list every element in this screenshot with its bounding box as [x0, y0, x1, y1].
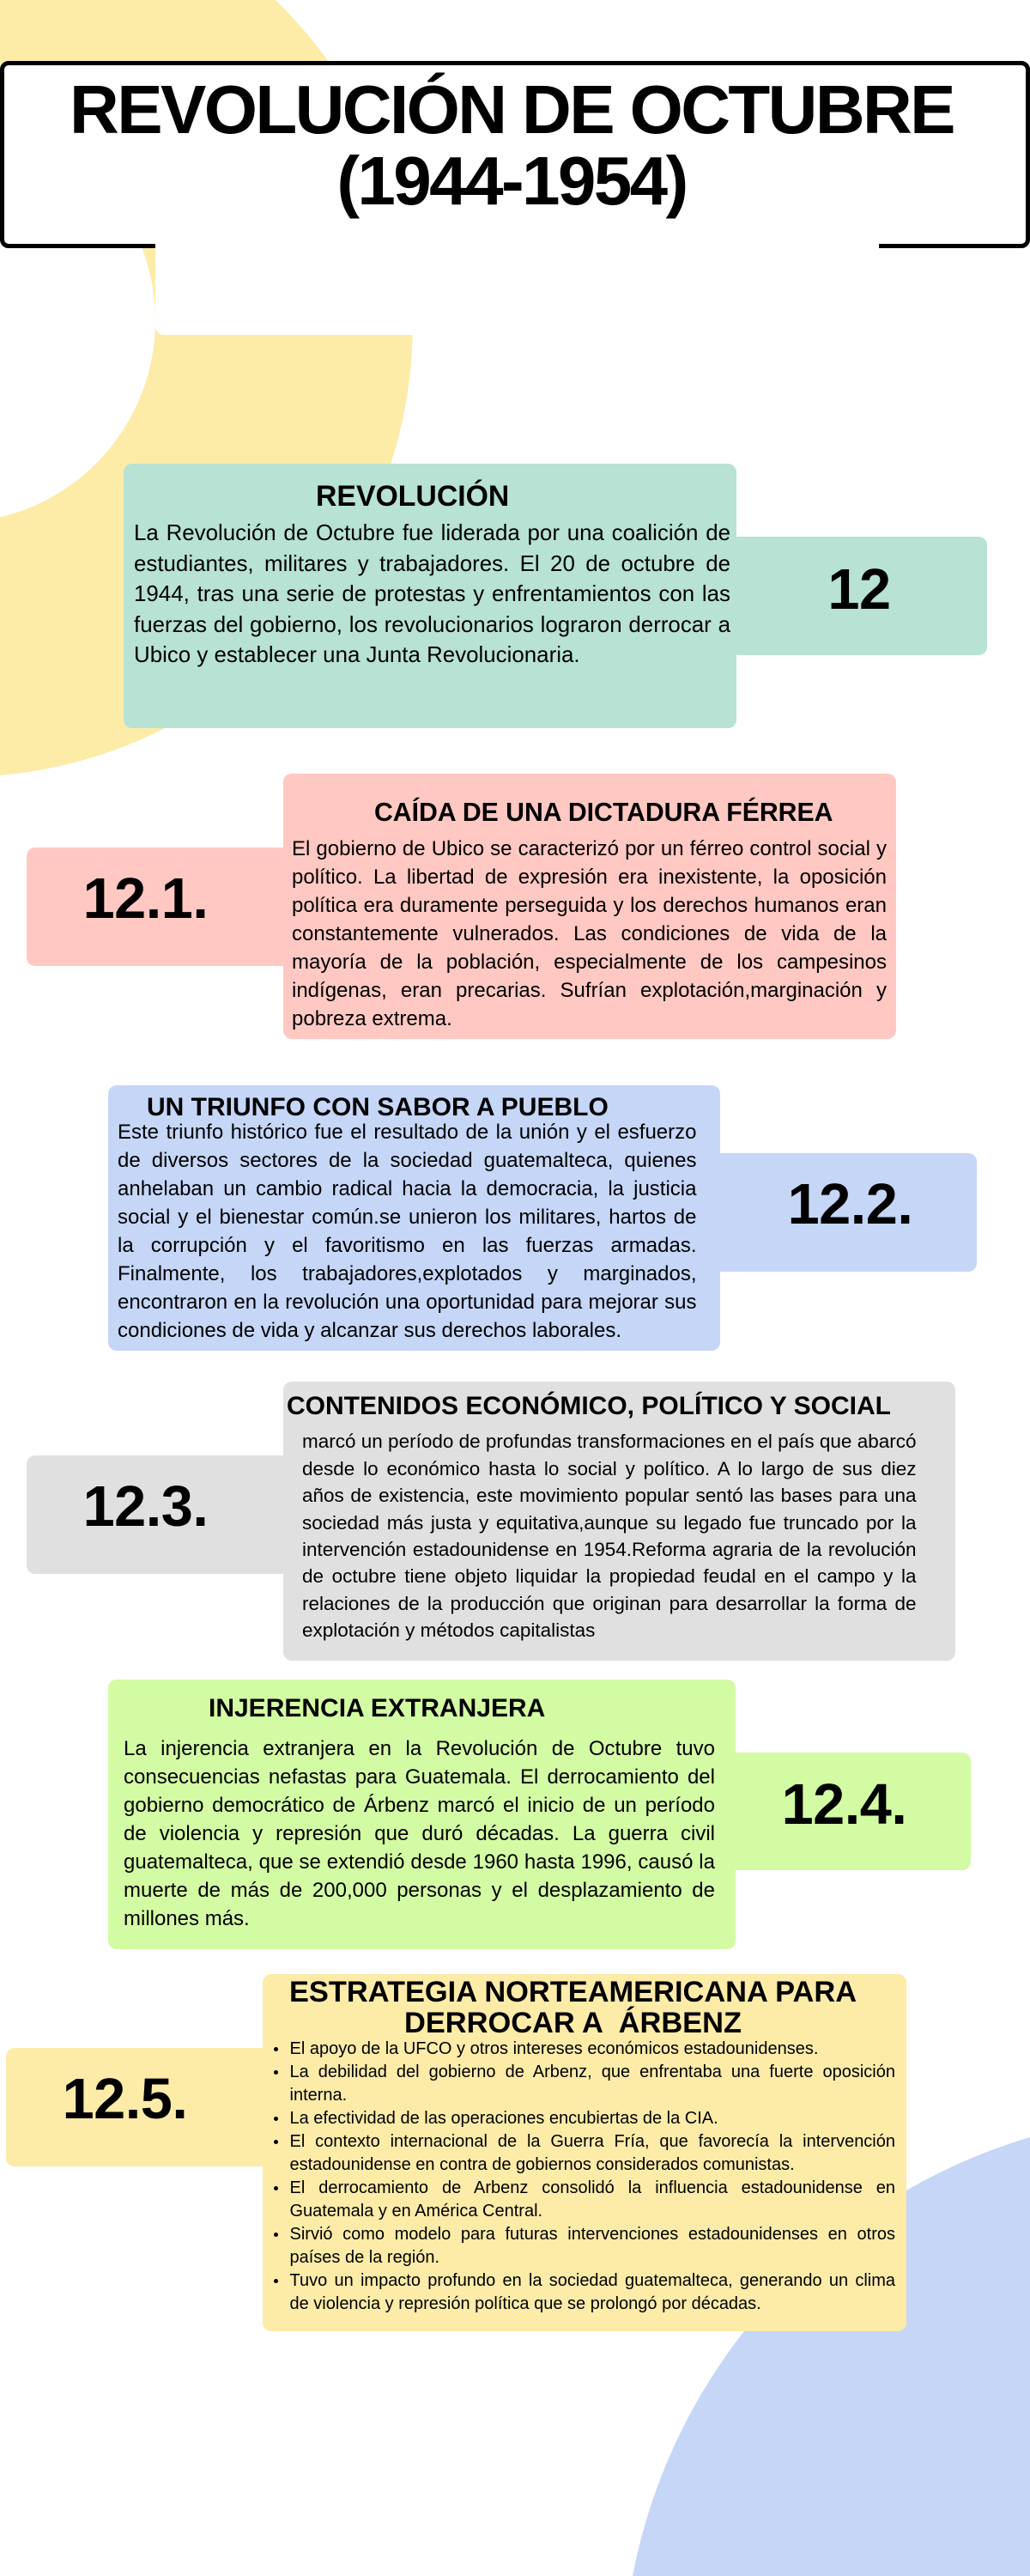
bullet list: Sirvió como modelo para futuras intervenciones estadounidenses en otros [290, 2224, 895, 2243]
body text: relaciones de la producción que originan para desarrollar la forma de [302, 1593, 917, 1614]
body text: desde lo económico hasta lo social y político. A lo largo de sus diez [302, 1458, 917, 1479]
body text: político. La libertad de expresión era inexistente, la oposición [292, 866, 887, 888]
body text: fuerzas del gobierno, los revolucionarios lograron derrocar a [134, 613, 730, 637]
heading: CAÍDA DE UNA DICTADURA FÉRREA [374, 799, 833, 827]
body text: anhelaban un cambio radical hacia la democracia, la justicia [118, 1176, 697, 1200]
section 12.4: Injerencia extranjera [108, 1680, 971, 1949]
body text: social y el bienestar común.se unieron los militares, hartos de [118, 1206, 697, 1228]
bullet list: El contexto internacional de la Guerra Fría, que favorecía la intervención [290, 2131, 895, 2150]
title: (1944-1954) [336, 143, 687, 219]
body text [292, 836, 887, 1030]
number 12.3: 12.3. [83, 1475, 208, 1539]
bullet list: países de la región. [290, 2248, 439, 2267]
bullet list: de violencia y represión política que se prolongó por décadas. [290, 2294, 761, 2313]
bullet list: Tuvo un impacto profundo en la sociedad guatemalteca, generando un clima [290, 2270, 895, 2289]
tab 12.3 [27, 1455, 283, 1574]
bullet list: estadounidense en contra de gobiernos considerados comunistas. [290, 2155, 795, 2174]
body text [124, 1736, 715, 1930]
body text: 1944, tras una serie de protestas y enfrentamientos con las [134, 582, 730, 606]
section 12.5: Estrategia norteamericana [6, 1974, 906, 2331]
body text: Ubico y establecer una Junta Revolucionaria. [134, 643, 580, 667]
body text: constantemente vulnerados. Las condiciones de vida de la [292, 922, 887, 945]
body text: encontraron en la revolución una oportunidad para mejorar sus [118, 1290, 697, 1314]
tab 12.4 [736, 1753, 971, 1870]
section 12: Revolución [124, 464, 987, 728]
body text: sociedad más justa y equitativa,aunque su legado fue truncado por la [302, 1512, 917, 1534]
body text: millones más. [124, 1906, 250, 1930]
tab 12 [736, 537, 987, 655]
tab 12.5 [6, 2048, 263, 2166]
tab 12.2 [720, 1153, 977, 1272]
heading: CONTENIDOS ECONÓMICO, POLÍTICO Y SOCIAL [287, 1392, 891, 1420]
title box [0, 61, 1030, 248]
body text: La injerencia extranjera en la Revolución de Octubre tuvo [124, 1736, 715, 1760]
body text: estudiantes, militares y trabajadores. El 20 de octubre de [134, 552, 730, 576]
number 12.1: 12.1. [83, 867, 208, 931]
yellow circle [0, 0, 413, 775]
body text: Este triunfo histórico fue el resultado de la unión y el esfuerzo [118, 1120, 697, 1144]
body text: mayoría de la población, especialmente de los campesinos [292, 950, 887, 974]
number 12.5: 12.5. [63, 2068, 187, 2131]
bullet list: El apoyo de la UFCO y otros intereses económicos estadounidenses. [290, 2038, 818, 2057]
section 12.2: Un triunfo con sabor a pueblo [108, 1085, 977, 1351]
panel [263, 1974, 906, 2331]
panel [124, 464, 736, 728]
title: REVOLUCIÓN DE OCTUBRE [70, 71, 954, 148]
body text: política era duramente perseguida y los derechos humanos eran [292, 893, 887, 917]
panel [283, 1382, 955, 1661]
body text [134, 521, 731, 667]
panel [108, 1085, 720, 1351]
bullet list [274, 2038, 895, 2313]
title [70, 71, 954, 219]
heading: REVOLUCIÓN [316, 479, 509, 512]
heading: INJERENCIA EXTRANJERA [209, 1693, 545, 1722]
body text: marcó un período de profundas transformaciones en el país que abarcó [302, 1431, 917, 1452]
body text: pobreza extrema. [292, 1006, 452, 1030]
body text: de violencia y represión que duró décadas. La guerra civil [124, 1822, 715, 1844]
body text: Finalmente, los trabajadores,explotados y marginados, [118, 1262, 697, 1285]
body text [118, 1120, 697, 1341]
blue circle [633, 2137, 1030, 2576]
body text: condiciones de vida y alcanzar sus derechos laborales. [118, 1319, 621, 1341]
body text: años de existencia, este movimiento popular sentó las bases para una [302, 1485, 917, 1506]
bullet list: La efectividad de las operaciones encubiertas de la CIA. [290, 2109, 718, 2128]
bullet list: La debilidad del gobierno de Arbenz, que enfrentaba una fuerte oposición [290, 2063, 895, 2081]
panel [283, 774, 896, 1039]
number 12.4: 12.4. [782, 1772, 906, 1836]
body text: la corrupción y el favoritismo en las fuerzas armadas. [118, 1233, 697, 1257]
body text: de diversos sectores de la sociedad guatemalteca, quienes [118, 1149, 697, 1171]
body text: de octubre tiene objeto liquidar la propiedad feudal en el campo y la [302, 1565, 917, 1587]
bullet list: El derrocamiento de Arbenz consolidó la influencia estadounidense en [290, 2178, 895, 2196]
body text: El gobierno de Ubico se caracterizó por un férreo control social y [292, 836, 887, 860]
tab 12.1 [27, 848, 283, 966]
number 12.2: 12.2. [788, 1173, 912, 1236]
body text: muerte de más de 200,000 personas y el desplazamiento de [124, 1879, 715, 1901]
body text [302, 1431, 917, 1641]
number 12: 12 [827, 558, 891, 622]
body text: gobierno democrático de Árbenz marcó el inicio de un período [124, 1793, 715, 1817]
body text: indígenas, eran precarias. Sufrían explotación,marginación y [292, 979, 887, 1001]
body text: guatemalteca, que se extendió desde 1960 hasta 1996, causó la [124, 1850, 715, 1874]
heading: ESTRATEGIA NORTEAMERICANA PARA DERROCAR A ÁRBENZ [289, 1975, 857, 2038]
bullet list: Guatemala y en América Central. [290, 2202, 542, 2221]
white rectangle overlapping title box [155, 239, 879, 335]
section 12.3: Contenidos económico, político y social [27, 1382, 955, 1661]
body text: explotación y métodos capitalistas [302, 1619, 595, 1641]
body text: intervención estadounidense en 1954.Reforma agraria de la revolución [302, 1539, 917, 1560]
body text: La Revolución de Octubre fue liderada por una coalición de [134, 521, 730, 545]
white circle cut-out [0, 124, 155, 517]
panel [108, 1680, 736, 1949]
body text: consecuencias nefastas para Guatemala. El derrocamiento del [124, 1765, 715, 1788]
bullet list: interna. [290, 2085, 347, 2104]
section 12.1: Caída de una dictadura férrea [27, 774, 896, 1039]
heading: UN TRIUNFO CON SABOR A PUEBLO [147, 1093, 609, 1121]
